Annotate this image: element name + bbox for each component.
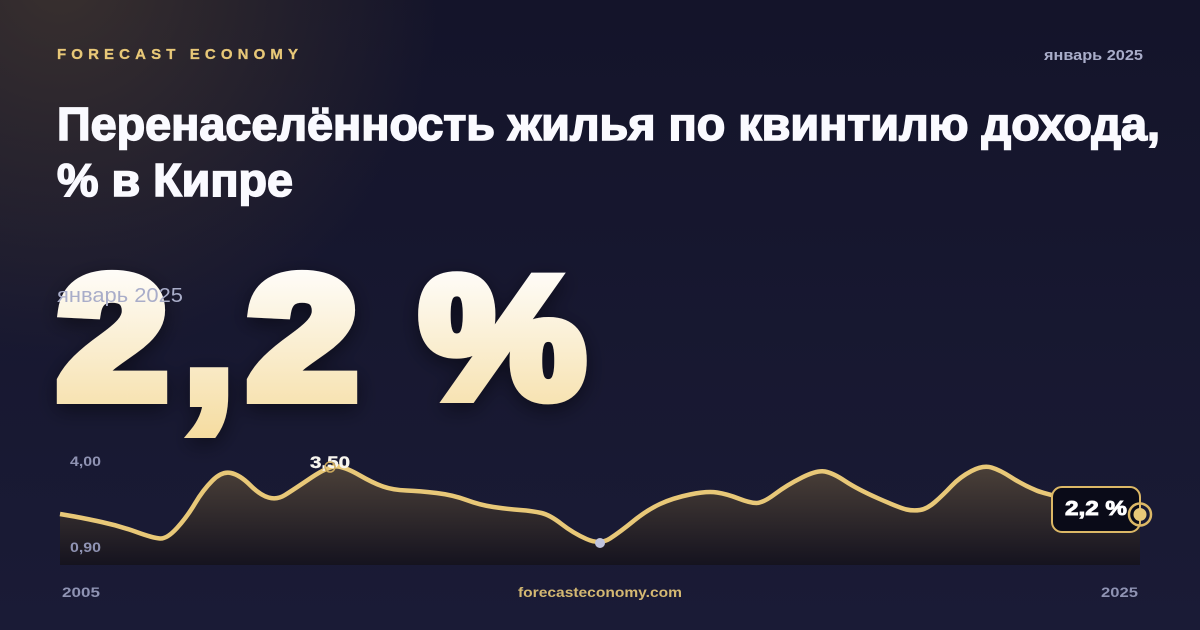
axis max label: 4,00 (70, 453, 101, 469)
big value: % (420, 241, 585, 434)
source url: forecasteconomy.com (518, 584, 682, 600)
title: % в Кипре (57, 154, 293, 206)
axis min label: 0,90 (70, 539, 101, 555)
overlay date: январь 2025 (57, 285, 183, 307)
area fill (60, 466, 1140, 565)
big value: , (181, 222, 237, 445)
peak label: 3,50 (310, 453, 350, 472)
title (57, 98, 1160, 206)
brand label: FORECAST ECONOMY (57, 46, 298, 63)
big value: 2 (58, 242, 167, 434)
callout (1052, 487, 1140, 532)
start year: 2005 (62, 584, 100, 600)
line (60, 466, 1140, 542)
big value (58, 222, 585, 445)
chart (60, 453, 1151, 565)
current value marker (1129, 504, 1151, 526)
big value: 2 (248, 242, 357, 434)
end year: 2025 (1101, 584, 1138, 600)
minimum marker (595, 538, 605, 548)
title: Перенаселённость жилья по квинтилю дохода, (57, 98, 1160, 150)
callout: 2,2 % (1065, 498, 1127, 520)
peak marker (325, 462, 335, 472)
date top right: январь 2025 (1044, 47, 1143, 64)
